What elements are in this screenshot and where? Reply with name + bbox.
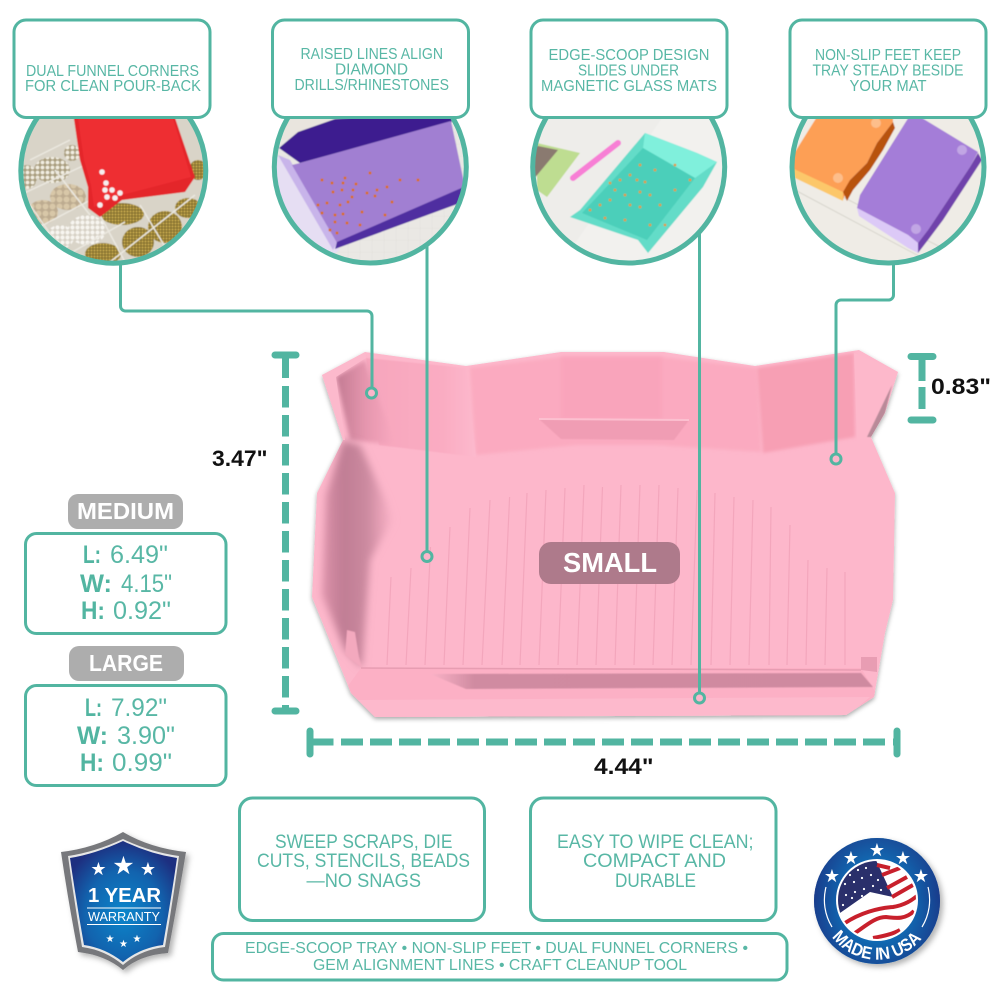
feature strip: GEM ALIGNMENT LINES • CRAFT CLEANUP TOOL	[313, 957, 687, 974]
badge stars: ★	[843, 848, 859, 868]
connector: raised lines	[426, 244, 428, 551]
size card: large: 3.90"	[117, 722, 175, 750]
connector: non-slip feet	[836, 262, 894, 454]
shield stars: ★	[140, 859, 156, 879]
photo circle: red tray with beads	[18, 119, 208, 266]
dimension: height 3.47: 3.47"	[212, 446, 268, 471]
size card: large	[26, 646, 226, 786]
shield stars	[90, 852, 156, 950]
text box: sweep scraps: —NO SNAGS	[306, 871, 421, 892]
callout: raised lines	[272, 20, 468, 118]
callout: raised lines: DIAMOND	[335, 62, 408, 78]
callout: edge scoop	[531, 20, 727, 118]
callout: non-slip feet: YOUR MAT	[850, 78, 927, 95]
size card: large: 0.99"	[112, 749, 172, 777]
callout: non-slip feet	[790, 20, 986, 118]
text box: sweep scraps	[240, 798, 484, 920]
shield stars: ★	[112, 852, 135, 880]
pointer dot: funnel corner	[366, 388, 376, 398]
pointer dot: raised lines	[422, 552, 432, 562]
made in USA badge	[814, 838, 946, 970]
text box: easy to wipe: DURABLE	[615, 871, 696, 892]
size card: medium: 4.15"	[121, 570, 172, 598]
dimension: width 4.44: 4.44"	[594, 754, 654, 779]
made in USA badge: MADE IN USA	[832, 930, 922, 960]
size badge: small: SMALL	[563, 547, 657, 578]
badge stars: ★	[895, 848, 911, 868]
text box: sweep scraps: SWEEP SCRAPS, DIE	[275, 832, 452, 853]
size card: medium: 0.92"	[113, 597, 171, 625]
size card: large: W:	[77, 722, 108, 750]
photo circle: non-slip feet	[790, 119, 986, 266]
warranty shield	[61, 832, 186, 970]
callout: raised lines: RAISED LINES ALIGN	[300, 46, 443, 63]
badge stars: ★	[824, 866, 840, 886]
dimension: width 4.44	[310, 731, 897, 779]
size card: large: LARGE	[89, 650, 163, 676]
dimension: depth 0.83: 0.83"	[931, 374, 991, 399]
size badge: small	[539, 542, 680, 584]
callout: dual funnel corners	[14, 20, 210, 118]
connector: edge scoop	[698, 232, 701, 693]
warranty shield: WARRANTY	[88, 910, 161, 924]
shield stars: ★	[119, 939, 128, 950]
text box: easy to wipe: COMPACT AND	[583, 851, 726, 872]
feature strip	[212, 934, 787, 980]
text box: easy to wipe	[530, 798, 776, 920]
badge stars: ★	[913, 866, 929, 886]
callout: non-slip feet: TRAY STEADY BESIDE	[812, 62, 964, 80]
size card: medium: H:	[81, 597, 105, 625]
pointer dot: edge scoop	[694, 693, 704, 703]
callout: edge scoop: SLIDES UNDER	[578, 62, 679, 80]
connector: dual funnel corners	[120, 262, 372, 388]
pink tray illustration	[312, 350, 898, 720]
size card: medium	[26, 494, 226, 634]
size card: medium: W:	[80, 570, 112, 598]
size card: medium: 6.49"	[110, 541, 168, 569]
dimension: height 3.47	[212, 355, 296, 711]
shield stars: ★	[133, 934, 142, 945]
pointer dot: feet	[831, 454, 841, 464]
flag	[838, 861, 916, 939]
size card: medium: MEDIUM	[77, 498, 174, 524]
callout: dual funnel corners: FOR CLEAN POUR-BACK	[25, 78, 202, 95]
callout: raised lines: DRILLS/RHINESTONES	[294, 77, 449, 94]
size card: large: L:	[85, 694, 102, 722]
badge stars: ★	[869, 840, 885, 860]
text box: easy to wipe: EASY TO WIPE CLEAN;	[557, 832, 754, 853]
photo circle: purple tray with drills	[272, 119, 469, 266]
dimension: depth 0.83	[911, 356, 991, 420]
shield stars: ★	[90, 859, 107, 879]
shield stars: ★	[106, 934, 115, 945]
callout: edge scoop: MAGNETIC GLASS MATS	[541, 78, 717, 95]
text box: sweep scraps: CUTS, STENCILS, BEADS	[257, 851, 470, 872]
callout: dual funnel corners: DUAL FUNNEL CORNERS	[26, 63, 199, 80]
warranty shield: 1 YEAR	[88, 885, 162, 907]
badge stars	[824, 840, 929, 886]
photo circle: mint tray on mat	[530, 119, 728, 266]
callout: edge scoop: EDGE-SCOOP DESIGN	[548, 47, 710, 64]
size card: large: H:	[80, 749, 104, 777]
size card: large: 7.92"	[111, 694, 167, 722]
callout: non-slip feet: NON-SLIP FEET KEEP	[815, 47, 961, 64]
feature strip: EDGE-SCOOP TRAY • NON-SLIP FEET • DUAL FUNNEL CORNERS •	[245, 940, 748, 957]
size card: medium: L:	[83, 541, 101, 569]
